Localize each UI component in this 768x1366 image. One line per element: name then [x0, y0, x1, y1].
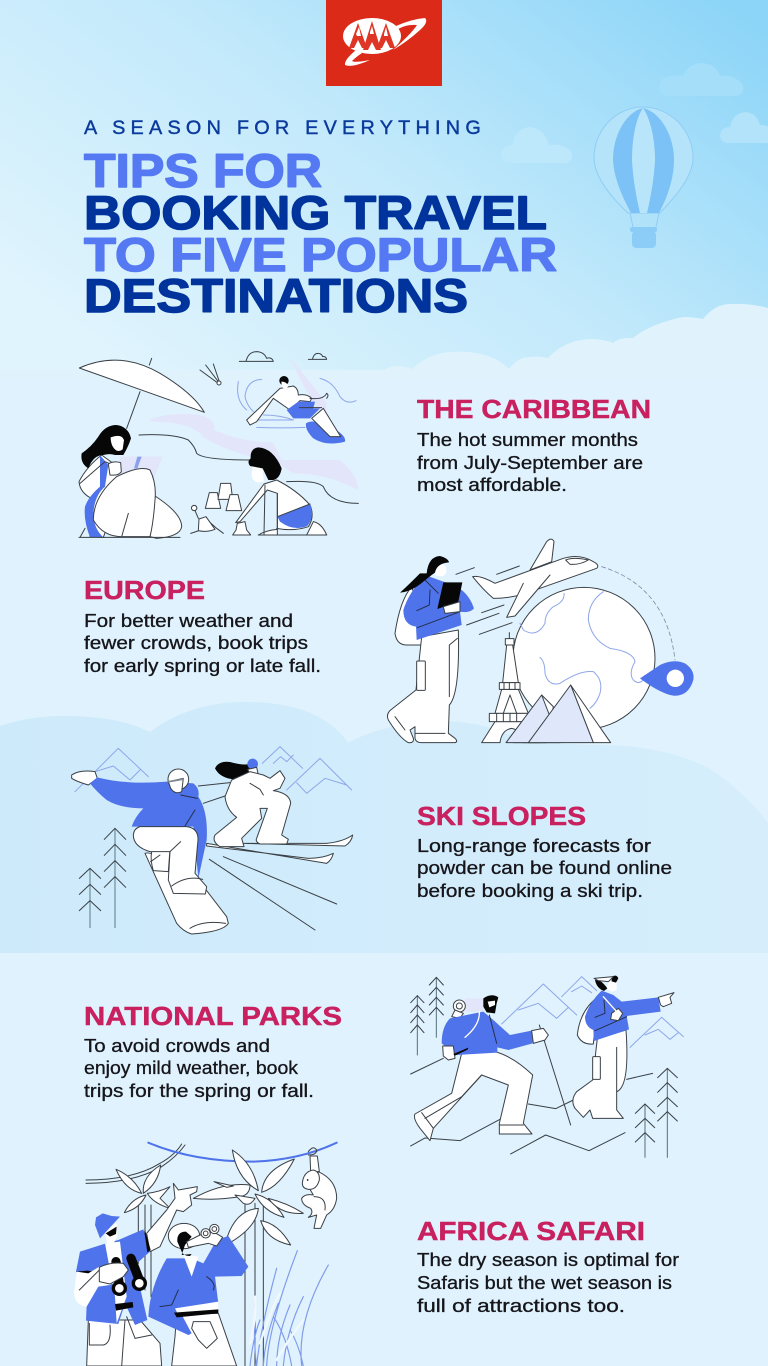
- large foreground cloud: [0, 304, 768, 380]
- text: Caribbean tip: [417, 430, 643, 495]
- text: National Parks tip: To avoid crowds and: [84, 1036, 270, 1056]
- text: Ski tip: Long-range forecasts for: [417, 836, 651, 856]
- plane: [473, 539, 598, 617]
- text: Ski tip: powder can be found online: [417, 858, 672, 878]
- woman hiker: [573, 976, 674, 1118]
- text: Ski tip: before booking a ski trip.: [417, 881, 643, 901]
- Eiffel Tower: [482, 633, 540, 743]
- AAA logo: [326, 0, 442, 86]
- text: Africa Safari tip: The dry season is optimal for: [417, 1250, 679, 1270]
- icon: hot air balloon: [594, 107, 693, 248]
- section: Africa Safari: [417, 1216, 679, 1316]
- text: Africa Safari tip: full of attractions too.: [417, 1296, 625, 1316]
- heading: Africa Safari: AFRICA SAFARI: [417, 1216, 645, 1246]
- illustration: skiers: [72, 747, 353, 934]
- illustration: safari: [74, 1143, 337, 1366]
- text: National Parks tip: trips for the spring or fall.: [84, 1081, 314, 1101]
- text: Europe tip: [84, 611, 321, 676]
- text: Africa Safari tip: Safaris but the wet season is: [417, 1273, 672, 1293]
- trekking pole: [539, 1025, 571, 1125]
- child: [233, 447, 327, 535]
- speed lines: [198, 783, 337, 930]
- section: Europe: [84, 575, 321, 676]
- section: Ski Slopes: [417, 801, 672, 901]
- illustration: Europe traveller: [387, 539, 694, 743]
- dotted flight path: [602, 567, 675, 660]
- globe: [513, 587, 655, 729]
- blue hanging vine: [148, 1143, 337, 1162]
- heading: Ski Slopes: SKI SLOPES: [417, 801, 586, 831]
- text: Ski tip: [417, 836, 672, 901]
- sky background: [0, 0, 768, 375]
- hills and mountains: [502, 977, 683, 1047]
- vines: [86, 1144, 185, 1183]
- monkey: [302, 1148, 337, 1228]
- snowboarder: [72, 769, 228, 934]
- text: Europe tip: for early spring or late fall.: [84, 656, 321, 676]
- woman with tablet: [387, 556, 474, 743]
- woman with binoculars: [148, 1223, 248, 1366]
- title: BOOKING TRAVEL: [84, 187, 547, 240]
- text: Africa Safari tip: [417, 1250, 679, 1316]
- lower page background: [0, 370, 768, 1366]
- text: Europe tip: For better weather and: [84, 611, 293, 631]
- title: TO FIVE POPULAR: [84, 229, 557, 282]
- sand cups: [191, 483, 242, 533]
- title: TIPS FOR: [84, 145, 322, 198]
- sky cloud right top: [659, 63, 743, 96]
- skier: [207, 759, 353, 863]
- pine trees: [79, 828, 126, 928]
- sky cloud far right: [720, 112, 768, 143]
- pyramids: [506, 685, 611, 743]
- text: Caribbean tip: from July-September are: [417, 453, 643, 473]
- bamboo trunks: [138, 1203, 263, 1366]
- text: Caribbean tip: most affordable.: [417, 475, 567, 495]
- ski section cloud band: [0, 702, 768, 953]
- man hiker: [414, 995, 548, 1141]
- grass: [250, 1251, 328, 1366]
- title: [84, 145, 557, 323]
- section: The Caribbean: [417, 394, 651, 495]
- bamboo leaves left: [116, 1165, 170, 1213]
- illustration: beach: [79, 352, 358, 538]
- mountains: [75, 747, 352, 793]
- heading: Europe: EUROPE: [84, 575, 205, 605]
- pine trees: [411, 977, 677, 1157]
- title: DESTINATIONS: [84, 270, 468, 323]
- text: National Parks tip: enjoy mild weather, book: [84, 1058, 299, 1078]
- location pin: [640, 661, 694, 696]
- speed lines: [456, 566, 519, 634]
- heading: National Parks: NATIONAL PARKS: [84, 1001, 342, 1031]
- bamboo leaves right: [193, 1150, 303, 1245]
- heading: The Caribbean: THE CARIBBEAN: [417, 394, 651, 424]
- text: National Parks tip: [84, 1036, 314, 1101]
- man pointing: [74, 1183, 197, 1366]
- section: National Parks: [84, 1001, 342, 1101]
- illustration: hikers: [411, 976, 683, 1157]
- text: Caribbean tip: The hot summer months: [417, 430, 638, 450]
- subtitle: A SEASON FOR EVERYTHING: [84, 118, 486, 139]
- surfer: [238, 376, 356, 444]
- sky cloud beside balloon: [501, 127, 572, 163]
- woman seated: [79, 425, 182, 538]
- text: Europe tip: fewer crowds, book trips: [84, 633, 308, 653]
